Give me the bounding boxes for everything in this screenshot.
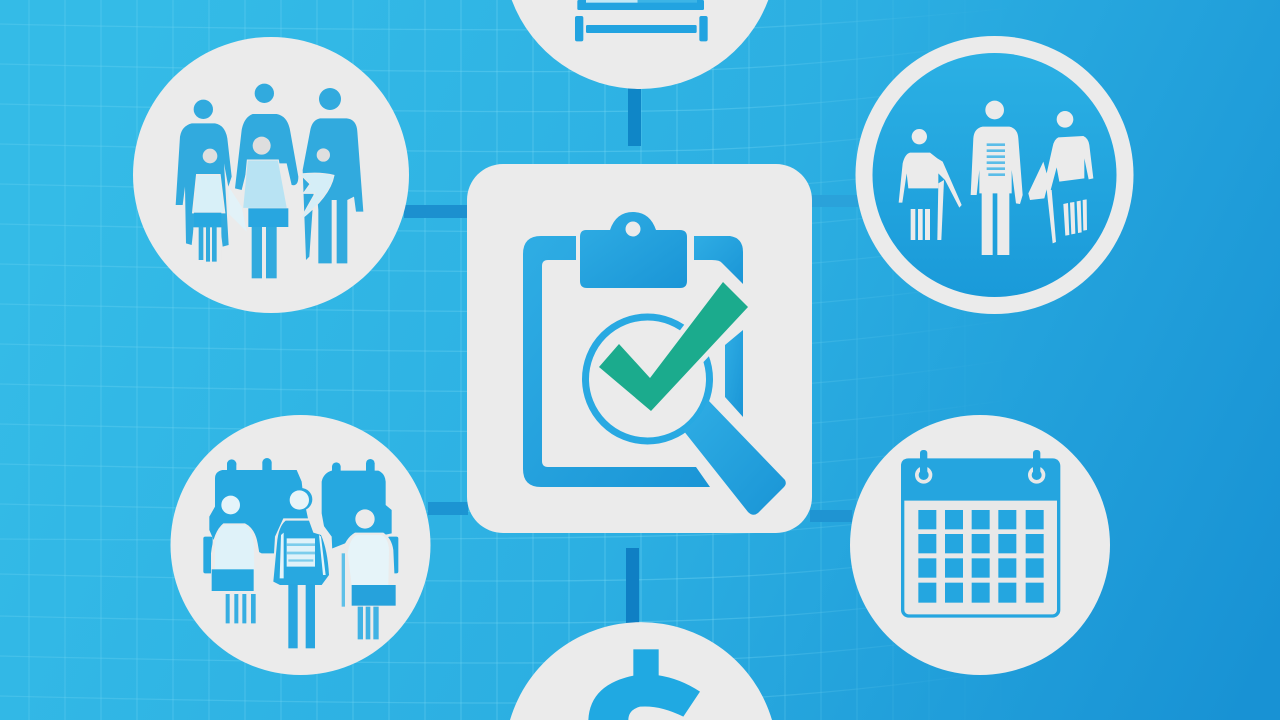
panel: lower right circle with calendar	[850, 415, 1110, 675]
icon: clipboard clip	[580, 212, 687, 288]
panel: bottom circle with dollar icon	[510, 622, 772, 720]
icon: magnifying glass	[586, 317, 786, 515]
right figure	[1028, 111, 1093, 243]
panel: lower left circle with figures and backpacks	[170, 415, 430, 675]
icon: hospital bed	[575, 0, 708, 41]
middle child	[243, 137, 288, 227]
icon: green check mark	[599, 282, 748, 411]
icon: people with backpacks	[203, 458, 398, 648]
connector: top	[628, 85, 641, 146]
connector: upper left	[404, 205, 468, 218]
connector: upper right	[810, 195, 858, 207]
middle figure	[272, 488, 333, 648]
right adult	[303, 88, 363, 263]
icon: three figures	[899, 101, 1093, 255]
left figure	[211, 496, 264, 623]
connector: lower right	[810, 510, 852, 522]
left child	[193, 149, 247, 262]
middle adult	[235, 84, 298, 278]
icon: dollar sign	[588, 649, 700, 720]
icon: clipboard body	[523, 236, 743, 487]
center figure	[971, 101, 1023, 255]
right figure	[342, 509, 396, 639]
panel: upper right ringed circle with three figures	[856, 36, 1134, 314]
panel: top circle with bed icon	[512, 0, 768, 89]
swoosh	[300, 173, 334, 220]
date grid	[918, 510, 1044, 603]
left figure	[899, 129, 962, 240]
panel: central clipboard card	[467, 164, 812, 533]
backpacks	[203, 458, 398, 573]
connector: bottom	[626, 548, 639, 624]
icon: family group	[176, 84, 363, 278]
icon: calendar	[901, 450, 1060, 616]
panel: upper left circle with family icon	[133, 37, 409, 313]
connector: lower left	[428, 502, 468, 515]
left adult	[176, 100, 232, 247]
